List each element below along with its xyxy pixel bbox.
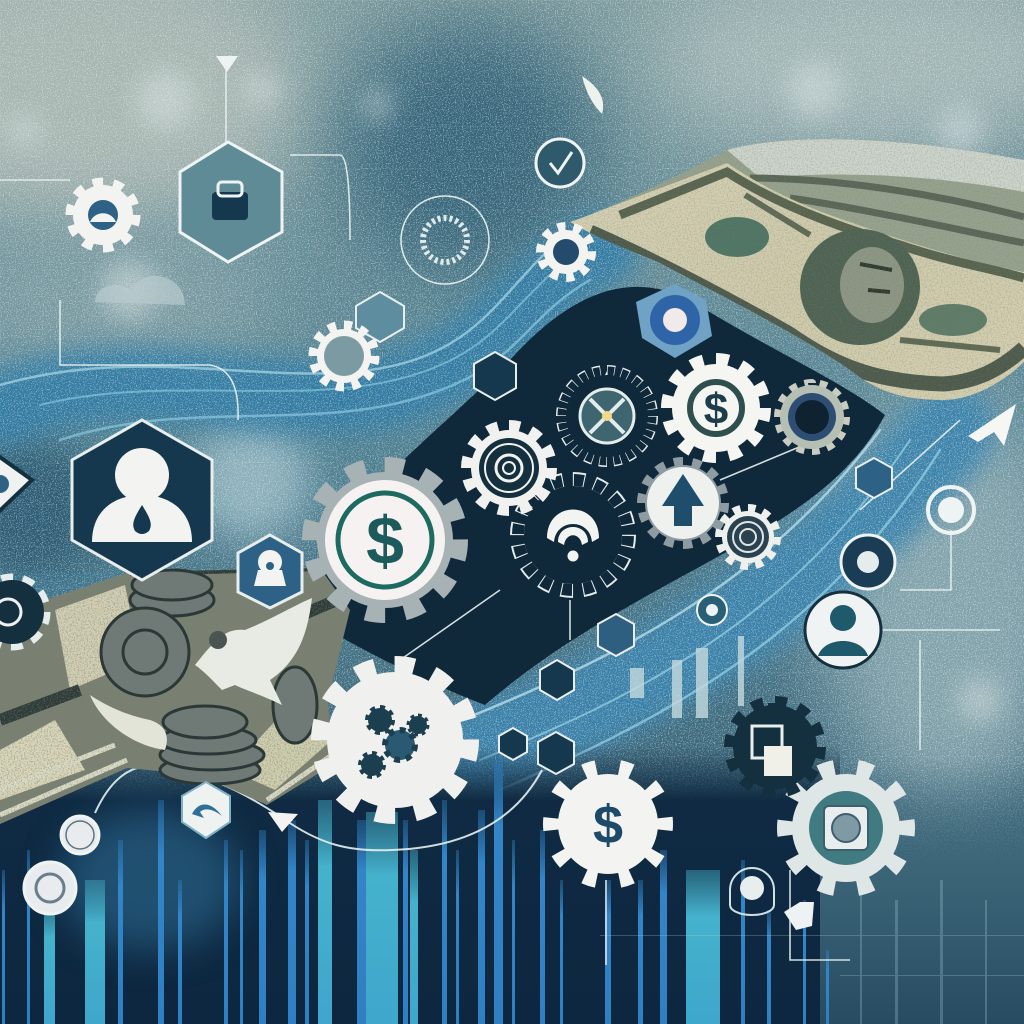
gear: concentric small xyxy=(719,508,777,566)
white coin face xyxy=(90,695,167,750)
ring icon: small target xyxy=(697,595,727,625)
gear: arrow xyxy=(643,463,723,543)
front bill face xyxy=(570,163,1024,400)
gear: light with square ring xyxy=(788,770,904,886)
hexagon: small lock xyxy=(238,535,302,608)
gear: ornate xyxy=(778,383,846,451)
gear: white with small dark gears xyxy=(321,666,469,814)
blue wave streaks xyxy=(0,250,950,750)
small outline hexagons xyxy=(356,292,892,774)
gear: white concentric xyxy=(468,427,550,509)
wave highlight lines xyxy=(0,240,940,790)
hexagon: return arrow xyxy=(182,782,230,838)
gear: white dollar bottom xyxy=(554,770,662,878)
bill portrait xyxy=(800,229,920,345)
ring icon: globe right xyxy=(841,535,895,589)
gear: white dollar xyxy=(668,360,764,456)
vertical bar field xyxy=(0,745,1024,1024)
bill border xyxy=(590,232,1024,384)
cloud icon xyxy=(95,276,185,305)
arrow: bottom curve head xyxy=(268,812,298,832)
gear: dark signal xyxy=(518,480,628,590)
gear: top left xyxy=(71,183,135,247)
gear: white dollar: $ xyxy=(704,385,728,434)
speckled blue haze xyxy=(60,810,240,950)
gear: white upper middle xyxy=(541,227,591,277)
wing xyxy=(195,598,312,705)
wedge top centre xyxy=(582,76,603,114)
ring icon: top right circle xyxy=(928,487,974,533)
gear: dark cross xyxy=(562,371,652,461)
hexagon: blue ring xyxy=(636,284,712,358)
gear: white dollar bottom: $ xyxy=(593,795,623,855)
ring icon: check top xyxy=(536,139,584,187)
blue bars xyxy=(2,760,829,1024)
ring icon: bottom left pair xyxy=(24,816,99,914)
ring icon: sunburst xyxy=(401,196,489,284)
bill engraved text xyxy=(745,195,1000,350)
arrow: upper right xyxy=(968,404,1016,446)
background mist blobs xyxy=(9,62,1002,722)
faint bar chart xyxy=(630,636,744,718)
hexagon: briefcase xyxy=(180,142,282,262)
dark central band xyxy=(296,287,885,705)
faint right bars xyxy=(600,880,1024,1024)
gear: dollar grey: $ xyxy=(366,503,404,579)
gear: white outline left xyxy=(313,325,375,387)
small icon cluster right bottom xyxy=(730,868,814,930)
gear: dark with squares xyxy=(731,703,819,791)
small dark gears xyxy=(361,708,427,776)
gear: dollar grey xyxy=(312,467,458,613)
coin stack xyxy=(101,570,317,784)
eye hexagon left edge xyxy=(0,450,32,520)
large hexagon: person xyxy=(72,420,212,580)
gear: dark left edge xyxy=(0,580,44,644)
banknotes and coins bottom left xyxy=(0,560,360,830)
bill seal xyxy=(705,217,769,257)
teal bars xyxy=(44,800,720,1024)
banknotes top right xyxy=(560,130,1024,410)
ring icon: person right xyxy=(805,592,881,668)
arrow: triangle top xyxy=(216,56,238,72)
